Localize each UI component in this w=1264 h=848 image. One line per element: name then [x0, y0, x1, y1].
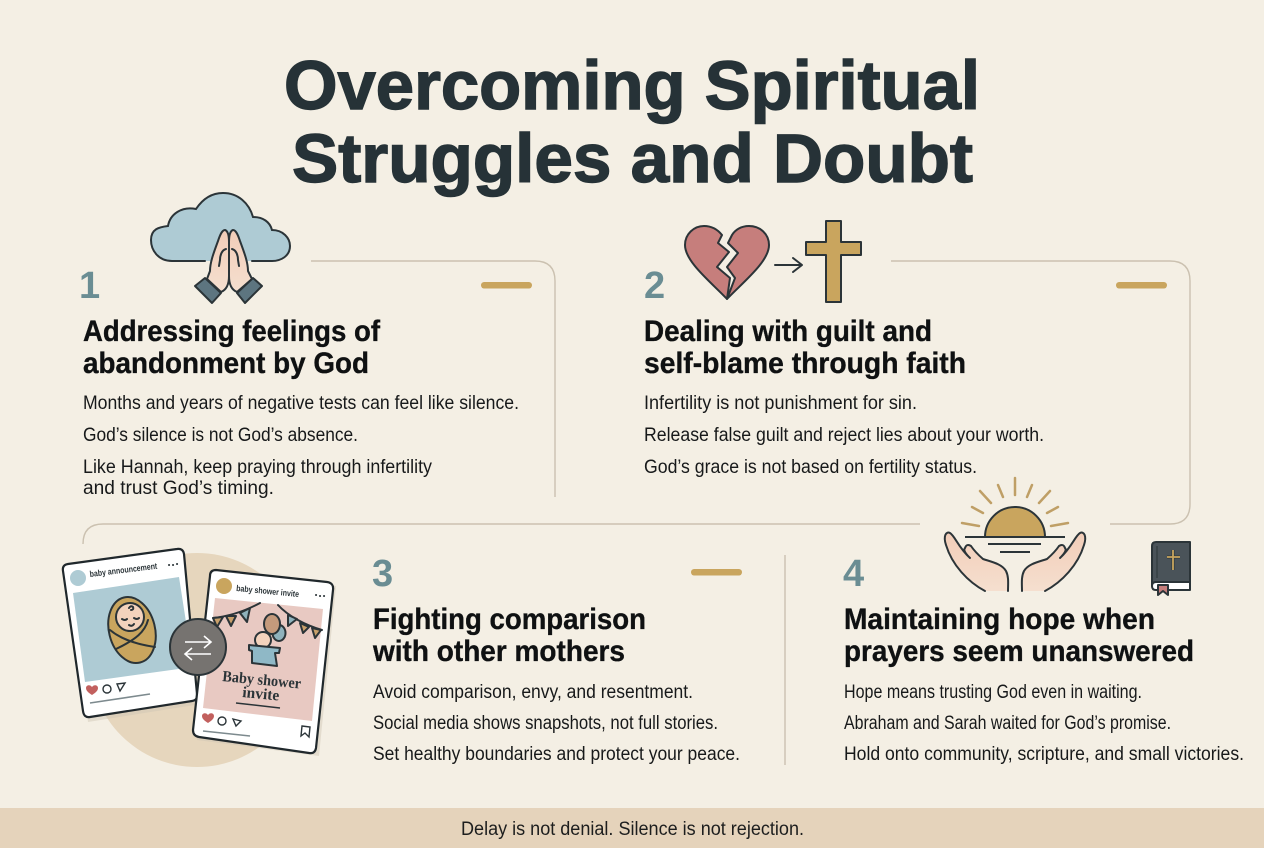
body text 2: Infertility is not punishment for sin. [644, 393, 917, 414]
icon: exchange arrows [170, 619, 226, 675]
heading 2: Dealing with guilt and [644, 315, 932, 348]
title: Overcoming Spiritual [284, 47, 980, 124]
post: baby shower invite [193, 570, 336, 756]
accent bar [481, 282, 532, 288]
number 1: 1 [79, 265, 100, 307]
post: baby shower invite: baby shower invite [236, 583, 300, 599]
panel 3: comparison [63, 549, 742, 767]
heading 4 [844, 603, 1194, 668]
icon: broken heart to cross [685, 221, 861, 302]
post: baby announcement: baby announcement [89, 561, 158, 579]
heading 1: abandonment by God [83, 347, 369, 380]
body text 3: Social media shows snapshots, not full stories. [373, 713, 718, 734]
heading 3: with other mothers [372, 635, 625, 668]
bunting and balloons [213, 603, 322, 666]
panel 4: hope [843, 478, 1244, 765]
footer banner: Delay is not denial. Silence is not rejection. [461, 819, 804, 840]
icon: bible [1152, 542, 1190, 595]
body text 4: Abraham and Sarah waited for God’s promise. [844, 713, 1171, 734]
heading 2 [644, 315, 966, 380]
body text 1: Months and years of negative tests can feel like silence. [83, 393, 519, 414]
title: Struggles and Doubt [292, 120, 973, 197]
icon: sunrise over open hands [945, 478, 1085, 591]
body text 1: Like Hannah, keep praying through infertility [83, 457, 432, 478]
post: baby shower invite: Baby shower [222, 668, 302, 693]
body text 3 [373, 682, 740, 765]
heading 4: Maintaining hope when [844, 603, 1155, 636]
heading 2: self-blame through faith [644, 347, 966, 380]
body text 3: Avoid comparison, envy, and resentment. [373, 682, 693, 703]
body text 4: Hope means trusting God even in waiting. [844, 682, 1142, 703]
heading 3: Fighting comparison [373, 603, 646, 636]
heading 3 [372, 603, 646, 668]
icon: cloud with praying hands [151, 193, 290, 303]
panel 1: abandonment [79, 193, 532, 499]
body text 2: God’s grace is not based on fertility status. [644, 457, 977, 478]
body text 1: God’s silence is not God’s absence. [83, 425, 358, 446]
body text 2 [644, 393, 1044, 478]
body text 1 [83, 393, 519, 499]
accent bar [691, 569, 742, 576]
baby in swaddle [102, 592, 162, 668]
body text 4: Hold onto community, scripture, and small victories. [844, 744, 1244, 765]
number 4: 4 [843, 553, 864, 595]
panel 2: guilt [644, 221, 1167, 478]
heading 1: Addressing feelings of [83, 315, 381, 348]
number 3: 3 [372, 553, 393, 595]
body text 1: and trust God’s timing. [83, 478, 274, 499]
body text 3: Set healthy boundaries and protect your peace. [373, 744, 740, 765]
post: baby announcement [63, 549, 201, 722]
accent bar [1116, 282, 1167, 288]
body text 2: Release false guilt and reject lies about your worth. [644, 425, 1044, 446]
heading 1 [83, 315, 381, 380]
footer banner [0, 808, 1264, 848]
number 2: 2 [644, 265, 665, 307]
post: baby shower invite: invite [242, 684, 280, 705]
heading 4: prayers seem unanswered [844, 635, 1194, 668]
icon: social media posts [63, 549, 336, 767]
title [284, 47, 980, 197]
body text 4 [844, 682, 1244, 765]
